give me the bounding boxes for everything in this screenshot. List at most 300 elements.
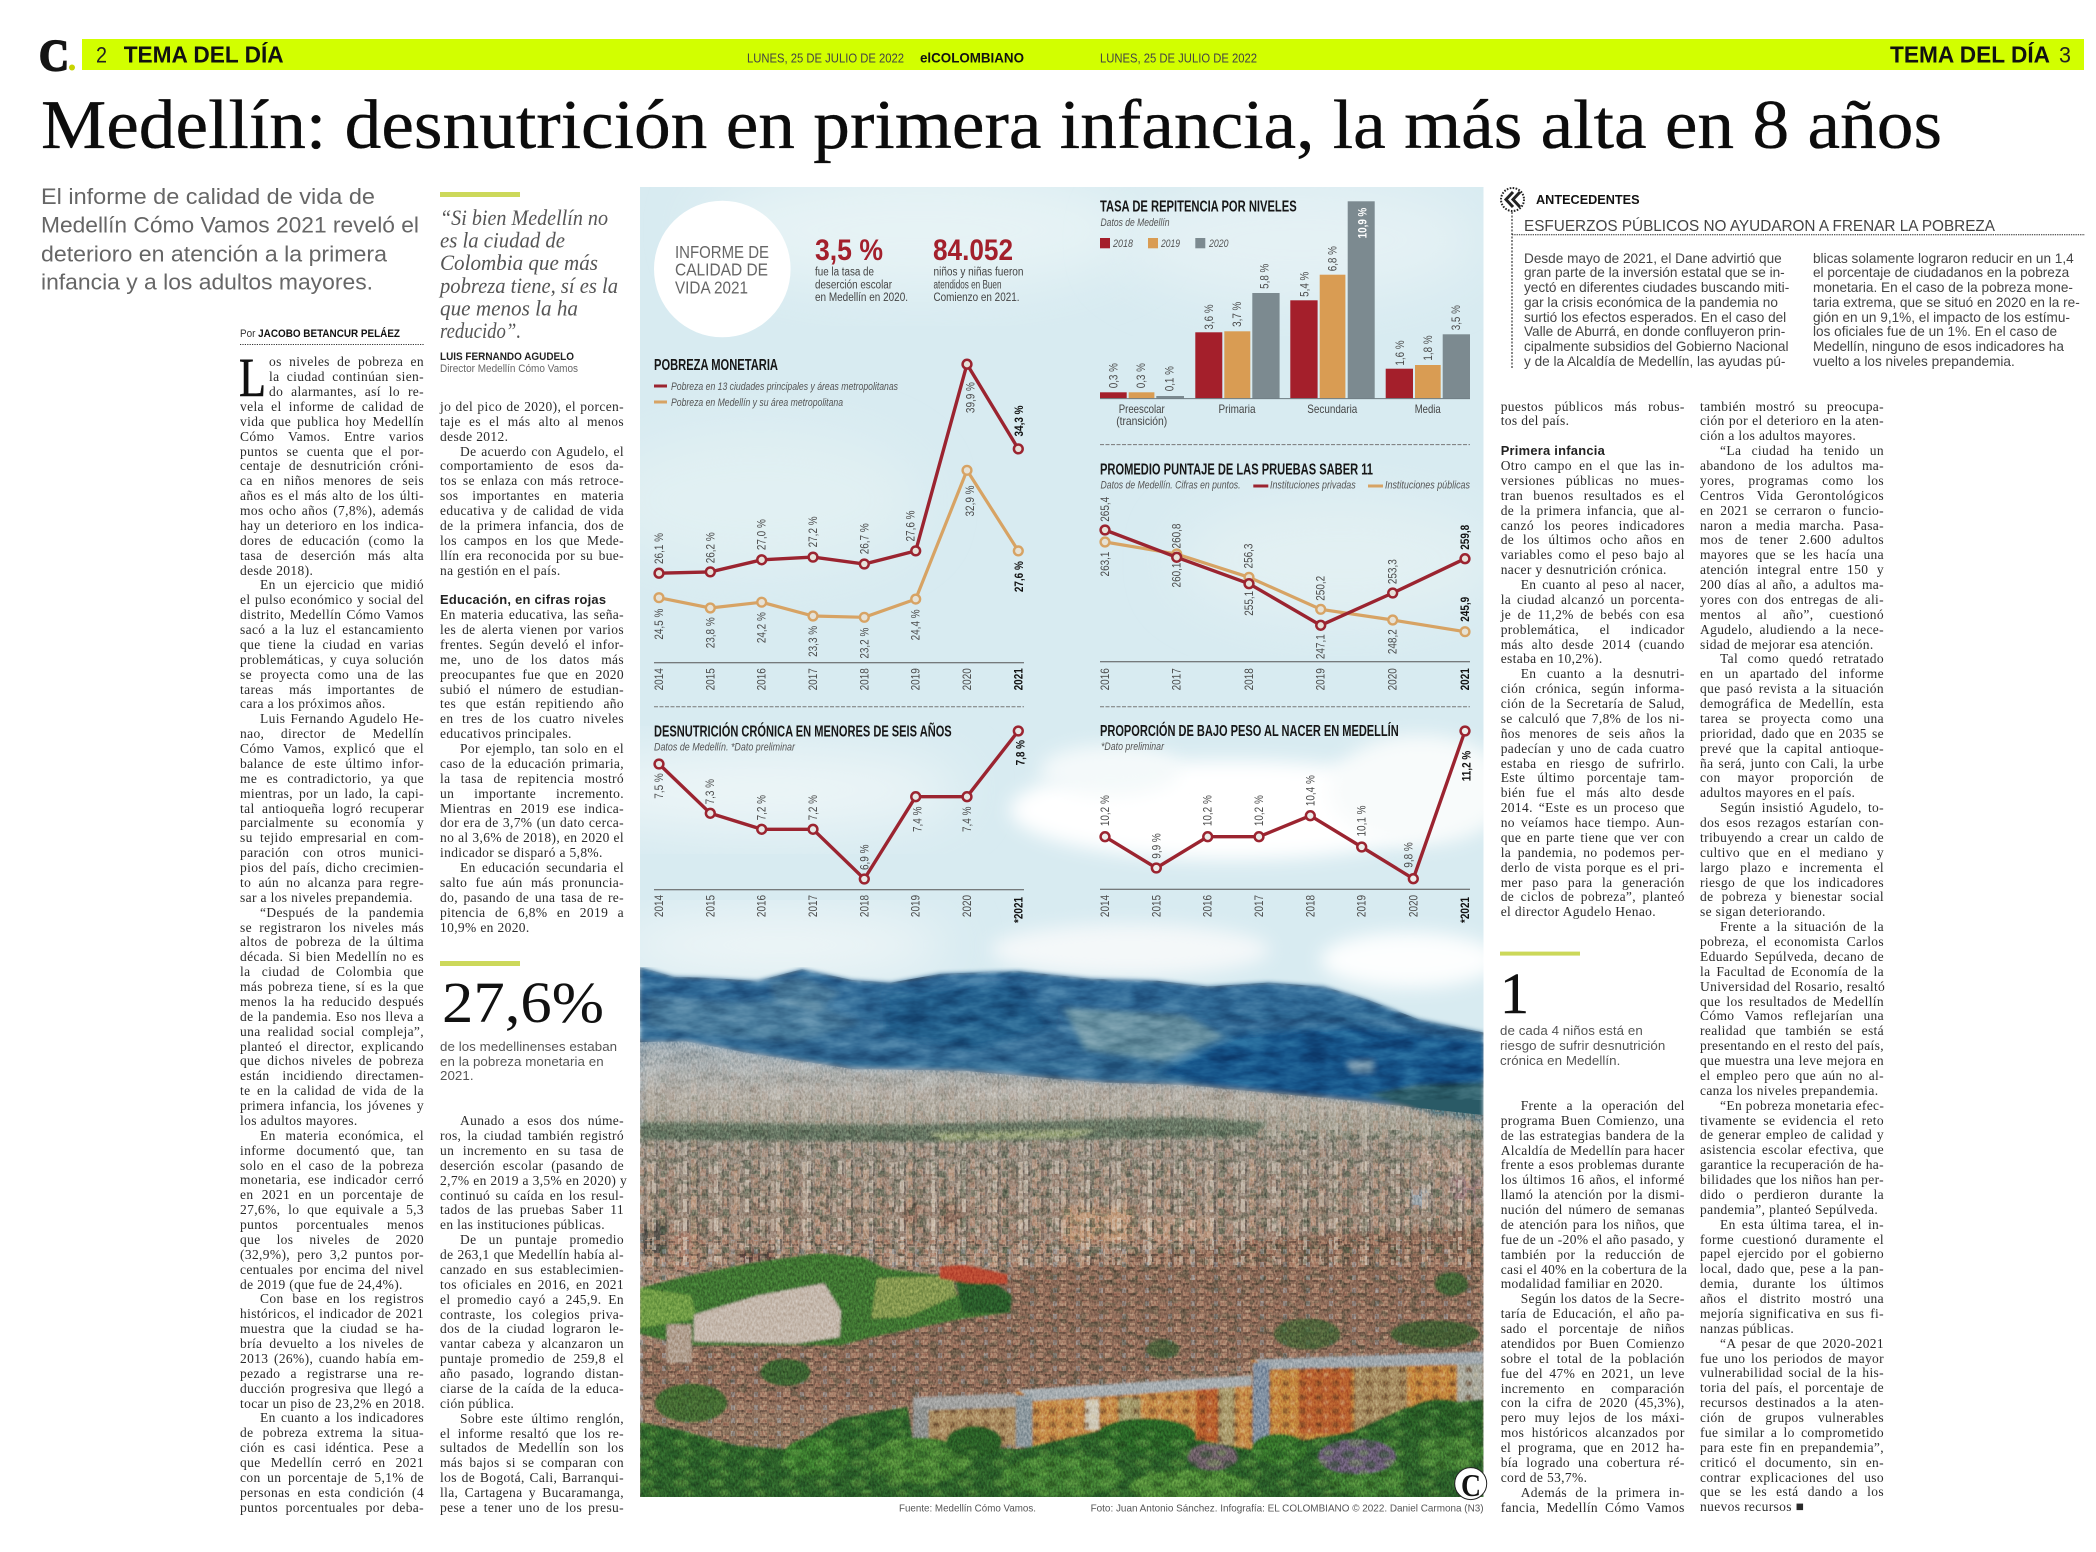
article column 2 lower: De un puntaje promedio: [460, 1232, 624, 1247]
tree and shadow specks: [640, 1130, 1484, 1400]
category labels: (transición): [1116, 414, 1167, 428]
photo: Medellín cityscape: [640, 960, 1485, 1505]
value labels: 1,6 %: [1394, 340, 1407, 366]
article column 3 lower: Según los datos de la Secre-: [1521, 1291, 1685, 1306]
article column 2 upper: educativa y de calidad de vida: [440, 503, 624, 518]
value labels: 3,5 %: [1450, 305, 1463, 330]
byline: Por JACOBO BETANCUR PELÁEZ: [240, 327, 400, 340]
article column 2 upper: salto fue aún más pronuncia-: [440, 875, 624, 890]
article column 1: puntos se cuenta que el por-: [240, 444, 424, 459]
value labels: 7,2 %: [807, 795, 820, 820]
article column 2 lower: contraste, los colegios priva-: [440, 1307, 624, 1322]
article column 1: bría devuelto a los niveles de: [240, 1336, 424, 1351]
article column 3 upper: la ciudad alcanzó un porcenta-: [1501, 592, 1685, 607]
article column 2 upper: de la primera infancia, dos de: [440, 518, 624, 533]
line: desnutrición: [655, 727, 1023, 883]
article column 3 upper: problemática, el indicador: [1501, 622, 1685, 637]
article column 2 upper: tos se enlaza con más retroce-: [440, 473, 624, 488]
article column 3 upper: tran buenos resultados es el: [1501, 488, 1685, 503]
article column 1: mientras, por un lado, la capi-: [240, 786, 424, 801]
article column 1: balance de este último infor-: [240, 756, 424, 771]
article column 3 lower: sobre el total de la población: [1501, 1351, 1685, 1366]
article column 1: solo en el caso de la pobreza: [240, 1158, 424, 1173]
stat caption: 1 de cada 4: [1500, 1023, 1665, 1068]
article column 1: distrito, Medellín Cómo Vamos: [240, 607, 424, 622]
sidebar text column 2: [1813, 251, 2080, 369]
value labels: 26,1 %: [653, 533, 666, 564]
article column 3 upper: tos del país.: [1501, 413, 1569, 428]
article column 3 upper: estaba en 10,2%).: [1501, 651, 1603, 666]
pull quote: reducido”.: [440, 318, 521, 343]
article column 3 lower: Alcaldía de Medellín para hacer: [1501, 1143, 1685, 1158]
article column 3 upper: Este último porcentaje tam-: [1501, 770, 1685, 785]
article column 4: Frente a la situación de la: [1720, 919, 1884, 934]
article column 2 upper: me, uno de los datos más: [440, 652, 624, 667]
panel label circle: informe de calidad de vida: INFORME DE: [675, 242, 769, 262]
article column 4: abandono de los adultos ma-: [1700, 458, 1884, 473]
article column 3 lower: cord de 53,7%.: [1501, 1470, 1587, 1485]
article column 4: asistencia escolar efectiva, que: [1700, 1142, 1884, 1157]
chart subtitle: *Dato preliminar: [1101, 741, 1165, 753]
article column 4: yores, programas como los: [1700, 473, 1884, 488]
article column 2 lower: ciarse de la caída de la educa-: [440, 1381, 624, 1396]
article column 3 upper: el director Agudelo Henao.: [1501, 904, 1656, 919]
year axis: 2018: [859, 668, 872, 690]
article column 1: do alarmantes, así lo re-: [269, 384, 424, 399]
pull quote: pobreza tiene, sí es la: [438, 273, 618, 298]
article column 4: que muestra una leve mejora en: [1700, 1053, 1884, 1068]
year axis: 2018: [1305, 895, 1318, 917]
article column 2 lower: puntaje promedio de 259,8 el: [440, 1351, 624, 1366]
article column 4: forme cuestionó duramente el: [1700, 1232, 1884, 1247]
value labels: 11,2 %: [1461, 751, 1474, 781]
article column 2 upper: caso de la educación primaria,: [440, 756, 624, 771]
sidebar text column 2: taria extrema, que se situó en 2020 en la re-: [1813, 295, 2080, 310]
value labels: 10,1 %: [1356, 805, 1369, 836]
far city: [640, 1041, 1484, 1142]
article column 1: la ciudad de Colombia que: [240, 964, 424, 979]
article column 4: de pobreza y bienestar social: [1700, 889, 1884, 904]
article column 4: Universidad del Rosario, resaltó: [1700, 979, 1885, 994]
stat: 3,5 %: 3,5 %: [815, 234, 883, 267]
stat callout: 1 de cada 4: 1: [1500, 961, 1529, 1026]
article column 4: nuevos recursos ■: [1700, 1499, 1804, 1514]
article column 1: los adultos mayores.: [240, 1113, 358, 1128]
deck text: [41, 184, 419, 294]
sidebar header: antecedentes: ANTECEDENTES: [1536, 193, 1640, 207]
article column 4: “La ciudad ha tenido un: [1720, 443, 1884, 458]
value labels: [1107, 207, 1463, 391]
article column 1: altos de pobreza de la última: [240, 934, 424, 949]
header bar: [82, 39, 2084, 70]
panel label circle: informe de calidad de vida: CALIDAD DE: [675, 260, 768, 280]
article column 1: cara a los próximos años.: [240, 696, 386, 711]
legend: [1253, 480, 1470, 492]
scattered slope trees: [760, 1359, 810, 1386]
value labels: 24,5 %: [653, 609, 666, 640]
stat: 84.052: 84.052: [933, 234, 1013, 267]
article column 3 lower: [1500, 1098, 1687, 1515]
article column 2 upper: preocupantes fue que en 2020: [440, 667, 624, 682]
article column 3 upper: padecían y uno de cada cuatro: [1501, 741, 1685, 756]
deck text: Medellín Cómo Vamos 2021 reveló el: [41, 213, 419, 238]
article column 4: yores con dos entregas de ali-: [1700, 592, 1884, 607]
panel label circle: informe de calidad de vida: VIDA 2021: [675, 277, 748, 297]
article column 1: te en la calidad de vida de la: [240, 1083, 424, 1098]
article column 3 lower: con la cifra de 2020 (45,3%),: [1501, 1395, 1685, 1410]
chart: bajo peso al nacer: [1099, 721, 1474, 923]
year axis: 2017: [807, 895, 820, 917]
article column 1: el pulso económico y social del: [240, 592, 424, 607]
article column 4: dido o perdieron durante la: [1700, 1187, 1884, 1202]
value labels: 7,2 %: [756, 795, 769, 820]
article column 2 upper: un importante incremento.: [440, 786, 624, 801]
year axis: 2019: [910, 895, 923, 917]
article column 4: canza los niveles prepandemia.: [1700, 1083, 1878, 1098]
article column 1: se registraron los niveles más: [240, 920, 424, 935]
year axis: 2017: [1171, 668, 1184, 690]
article column 1: parcialmente su economía y: [240, 815, 424, 830]
bars: preescolar: [1100, 392, 1184, 398]
article column 2 lower: ros, la ciudad también registró: [440, 1128, 624, 1143]
article column 4: “En pobreza monetaria efec-: [1720, 1098, 1884, 1113]
stat: 3,5 %: [815, 234, 908, 304]
chart heading: POBREZA MONETARIA: [654, 357, 778, 374]
drop cap: L: [239, 347, 266, 408]
article column 1: pezado a registrarse una re-: [240, 1366, 424, 1381]
article column 1: históricos, el indicador de 2021: [240, 1306, 424, 1321]
article column 4: fue similar a lo comprometido: [1700, 1425, 1884, 1440]
stat: 84.052: niños y niñas fueron: [934, 267, 1024, 279]
article column 3 lower: frente a esos problemas durante: [1501, 1157, 1685, 1172]
article column 2 upper: do, pasando de una tasa de re-: [440, 890, 624, 905]
value labels: 253,3: [1387, 559, 1400, 584]
article column 1: hay un deterioro en los indica-: [240, 518, 424, 533]
article column 1: ca en niños menores de seis: [240, 473, 424, 488]
value labels: 27,6 %: [1013, 561, 1026, 592]
article column 4: contrar explicaciones del uso: [1700, 1470, 1884, 1485]
article column 2 lower: Aunado a esos dos núme-: [460, 1113, 624, 1128]
article column 2 lower: ción pública.: [440, 1396, 514, 1411]
title: Medellín: desnutrición en primera infancia, la más alta en 8 años: [41, 87, 1942, 164]
article column 4: ción de grupos vulnerables: [1700, 1410, 1884, 1425]
chart subtitle: Datos de Medellín. *Dato preliminar: [654, 742, 796, 754]
article column 3 upper: puestos públicos más robus-: [1501, 399, 1685, 414]
article column 4: ción por el deterioro en la aten-: [1700, 413, 1884, 428]
article column 2 upper: llín era reconocida por su bue-: [440, 548, 624, 563]
article column 1: 2013 (26%), cuando había em-: [240, 1351, 424, 1366]
sidebar text column 1: gar la crisis económica de la pandemia no: [1524, 295, 1778, 310]
year axis: [1099, 668, 1472, 690]
article column 1: problemáticas, y cuya solución: [240, 652, 424, 667]
year axis: 2015: [705, 895, 718, 917]
article column 2 lower: tos oficiales en 2016, en 2021: [440, 1277, 624, 1292]
deck text: infancia y a los adultos mayores.: [41, 269, 373, 294]
far and mid city towers: [640, 1040, 1484, 1470]
article column 3 upper: más alto desde 2014 (cuando: [1501, 637, 1685, 652]
value labels: 26,2 %: [705, 532, 718, 563]
chart subtitle: Datos de Medellín. Cifras en puntos.: [1100, 480, 1240, 492]
bars: secundaria: [1290, 201, 1375, 398]
category labels: Primaria: [1218, 402, 1256, 416]
article column 4: Centros Vida Gerontológicos: [1700, 488, 1884, 503]
article column 4: pobreza, el economista Carlos: [1700, 934, 1884, 949]
year axis: 2014: [653, 895, 666, 917]
line: pobreza Medellín: [655, 466, 1023, 622]
article column 4: garantice la recuperación de ha-: [1700, 1157, 1884, 1172]
stat: 3,5 %: deserción escolar: [815, 280, 892, 292]
article column 4: Agudelo, aludiendo a la nece-: [1700, 622, 1884, 637]
chart subtitle: Datos de Medellín: [1100, 217, 1170, 229]
article column 2 lower: continuó su caída en los resul-: [440, 1188, 624, 1203]
article column 2 lower: [440, 1113, 627, 1515]
article column 4: ción a los adultos mayores.: [1700, 428, 1856, 443]
article column 1: “Después de la pandemia: [260, 905, 424, 920]
value labels: 0,3 %: [1135, 363, 1148, 388]
article column 4: 200 días al año, a adultos ma-: [1700, 577, 1884, 592]
article column 2 upper: Por ejemplo, tan solo en el: [460, 741, 624, 756]
article column 1: ducción progresiva que llegó a: [240, 1381, 424, 1396]
article column 2 lower: más bajos si se comparan con: [440, 1455, 624, 1470]
icon: El Colombiano logo: C: [39, 31, 69, 80]
article column 3 lower: sado el porcentaje de niños: [1501, 1321, 1685, 1336]
article column 3 upper: de la primera infancia, que al-: [1501, 503, 1685, 518]
sidebar text column 2: los oficiales fue de un 1%. En el caso de: [1813, 324, 2057, 339]
icon: logo on photo: C: [1461, 1467, 1481, 1503]
article column 3 upper: bién fue el más alto desde: [1501, 785, 1685, 800]
article column 2 upper: frentes. Según develó el infor-: [440, 637, 624, 652]
article column 1: to aún no alcanza para regre-: [240, 875, 424, 890]
article column 1: muestra que la ciudad se ha-: [240, 1321, 424, 1336]
article column 4: demográfica de Medellín, esta: [1700, 696, 1884, 711]
article column 3 upper: no veíamos hace tiempo. Aun-: [1501, 815, 1685, 830]
article column 3 lower: de atención para los niños, que: [1501, 1217, 1685, 1232]
article column 4: cultivo que en el mediano y: [1700, 845, 1884, 860]
article column 4: en 2021 se cerraron o funcio-: [1700, 503, 1884, 518]
value labels: 24,4 %: [910, 609, 923, 640]
chart heading: PROPORCIÓN DE BAJO PESO AL NACER EN MEDELLÍN: [1100, 721, 1399, 740]
category labels: Media: [1415, 402, 1441, 416]
category labels: Preescolar: [1119, 402, 1165, 416]
article column 1: de pobreza extrema la situa-: [240, 1425, 424, 1440]
year axis: [653, 668, 1026, 690]
header left date: LUNES, 25 DE JULIO DE 2022: [747, 51, 904, 66]
value labels: [653, 382, 1026, 659]
article column 4: papel ejercido por el gobierno: [1700, 1246, 1884, 1261]
article column 3 lower: fancia, Medellín Cómo Vamos: [1501, 1500, 1685, 1515]
article column 4: bilidades que los niños han per-: [1700, 1172, 1884, 1187]
value labels: 1,8 %: [1422, 335, 1435, 361]
pull quote: Director Medellín Cómo Vamos: [440, 363, 578, 375]
value labels: 265,4: [1099, 497, 1112, 522]
sidebar text column 2: blicas solamente lograron reducir en un 1,4: [1813, 251, 2074, 266]
sidebar text column 1: gran parte de la inversión estatal que se in-: [1524, 265, 1785, 280]
legend: Instituciones públicas: [1385, 480, 1470, 492]
stat caption: 27,6%: en la pobreza monetaria en: [440, 1054, 604, 1068]
article column 2 upper: [440, 399, 624, 935]
year axis: 2018: [1243, 668, 1256, 690]
article column 4: Tal como quedó retratado: [1720, 651, 1884, 666]
value labels: 26,7 %: [859, 523, 872, 554]
article column 4: [1700, 399, 1885, 1514]
article column 4: en un apartado del informe: [1700, 666, 1884, 681]
year axis: 2015: [1151, 895, 1164, 917]
value labels: 10,2 %: [1253, 795, 1266, 826]
article column 2 lower: un incremento en su tasa de: [440, 1143, 624, 1158]
legend: Pobreza en Medellín y su área metropolitana: [671, 397, 843, 409]
article column 4: nanzas públicas.: [1700, 1321, 1794, 1336]
article column 2 lower: año pasado, logrando distan-: [440, 1366, 624, 1381]
value labels: 9,9 %: [1151, 833, 1164, 859]
year axis: 2016: [1099, 668, 1112, 690]
deck text: deterioro en atención a la primera: [41, 242, 388, 267]
article column 1: 27,6%, lo que equivale a 5,3: [240, 1202, 424, 1217]
article column 2 lower: el informe resaltó que los re-: [440, 1426, 624, 1441]
stat: 84.052: Comienzo en 2021.: [934, 292, 1020, 304]
article column 2 upper: En educación secundaria el: [460, 860, 624, 875]
header right date: LUNES, 25 DE JULIO DE 2022: [1100, 51, 1257, 66]
article column 3 lower: Frente a la operación del: [1521, 1098, 1685, 1113]
article column 3 upper: de ciclos de pobreza”, planteó: [1501, 889, 1685, 904]
stat caption: 1 de cada 4: riesgo de sufrir desnutrición: [1500, 1038, 1665, 1053]
year axis: 2014: [653, 668, 666, 690]
article column 3 lower: mos históricos alcanzados por: [1501, 1425, 1685, 1440]
article column 2 lower: Sobre este último renglón,: [460, 1411, 624, 1426]
article column 3 lower: modalidad familiar en 2020.: [1501, 1276, 1663, 1291]
year axis: 2020: [1408, 895, 1421, 917]
icon: double chevron badge: [1501, 188, 1524, 211]
chart: promedio pruebas Saber 11: [1099, 461, 1472, 690]
value labels: 5,4 %: [1298, 272, 1312, 297]
article column 4: mayores que se les hacía una: [1700, 547, 1884, 562]
value labels: 23,3 %: [807, 626, 820, 657]
article column 3 lower: de las estrategias bandera de la: [1501, 1128, 1685, 1143]
article column 2 upper: educativos principales.: [440, 726, 572, 741]
value labels: 7,3 %: [704, 779, 717, 804]
valley green strip: [640, 1117, 1268, 1142]
article column 3 upper: de los últimos ocho años en: [1501, 532, 1685, 547]
header left page number: 2: [96, 43, 107, 68]
article column 1: Luis Fernando Agudelo He-: [260, 711, 424, 726]
article column 2 lower: los de Bogotá, Cali, Barranqui-: [440, 1470, 624, 1485]
sidebar text column 1: cipalmente subsidios del Gobierno Nacional: [1524, 339, 1788, 354]
article column 4: que pasó revista a la situación: [1700, 681, 1884, 696]
value labels: 248,2: [1387, 629, 1400, 654]
article column 1: En un ejercicio que midió: [260, 577, 424, 592]
year axis: 2020: [1387, 668, 1400, 690]
article column 2 lower: de 263,1 que Medellín había al-: [440, 1247, 624, 1262]
stat callout: 1 de cada 4: [1500, 952, 1580, 1026]
article column 4: largo plazo e incrementa el: [1700, 860, 1884, 875]
article column 4: toria del país, el porcentaje de: [1700, 1380, 1884, 1395]
stat caption: 1 de cada 4: de cada 4 niños está en: [1500, 1023, 1643, 1038]
article column 4: criticó el documento, sin en-: [1700, 1455, 1884, 1470]
value labels: 256,3: [1243, 544, 1256, 568]
bars: primaria: [1195, 293, 1280, 398]
article column 1: sar a los niveles prepandemia.: [240, 890, 413, 905]
article column 3 lower: pero muy lejos de los máxi-: [1501, 1410, 1685, 1425]
legend: Pobreza en 13 ciudades principales y áreas metropolitanas: [671, 381, 898, 393]
article column 4: que los resultados de Medellín: [1700, 994, 1884, 1009]
article column 2 upper: les de alerta vienen por varios: [440, 622, 624, 637]
value labels: 259,8: [1459, 525, 1472, 550]
chart heading: TASA DE REPITENCIA POR NIVELES: [1100, 198, 1297, 215]
article column 2 lower: vantar cabeza y alcanzaron un: [440, 1336, 624, 1351]
sidebar header: antecedentes: [1501, 188, 2085, 369]
article column 1: centaje de desnutrición cróni-: [240, 458, 424, 473]
article column 4: que se les está dando a los: [1700, 1484, 1884, 1499]
hillside houses: [640, 1240, 1484, 1470]
stat: 84.052: [933, 234, 1024, 304]
value labels: 7,8 %: [1015, 740, 1028, 765]
sidebar text column 1: Desde mayo de 2021, el Dane advirtió que: [1524, 251, 1782, 266]
article column 4: ña será, junto con Cali, la urbe: [1700, 756, 1884, 771]
value labels: 260,8: [1171, 524, 1184, 548]
value labels: 263,1: [1099, 552, 1112, 576]
article column 2 lower: pese a tener uno de los presu-: [440, 1500, 624, 1515]
building and foliage grain: [640, 1040, 1484, 1497]
sidebar text column 2: vuelto a los niveles prepandemia.: [1813, 354, 2015, 369]
year axis: 2015: [705, 668, 718, 690]
quote attribution: LUIS FERNANDO AGUDELO: [440, 351, 574, 363]
article column 3 lower: fue del 47% en 2021, un leve: [1501, 1366, 1685, 1381]
sidebar text column 1: [1524, 251, 1789, 369]
header left section name: TEMA DEL DÍA: [124, 41, 284, 68]
article column 3 upper: ños menores de seis años la: [1501, 726, 1685, 741]
article column 3 upper: ción crónica, según informa-: [1501, 681, 1685, 696]
article column 4: presentando en el resto del país,: [1700, 1038, 1884, 1053]
main city: [640, 1138, 1484, 1499]
article column 3 upper: ción de la Secretaría de Salud,: [1501, 696, 1685, 711]
article column 1: (32,9%), pero 3,2 puntos por-: [240, 1247, 424, 1262]
article column 2 lower: en las instituciones públicas.: [440, 1217, 605, 1232]
article column 1: En cuanto a los indicadores: [260, 1410, 424, 1425]
article column 4: para este fin en prepandemia”,: [1700, 1440, 1884, 1455]
foreground apartment buildings: [928, 1406, 1016, 1446]
article column 3 upper: que en parte tiene que ver con: [1501, 830, 1685, 845]
article column 1: puntos porcentuales menos: [240, 1217, 424, 1232]
panel label circle: informe de calidad de vida: [654, 201, 791, 337]
value labels: 34,3 %: [1013, 405, 1026, 436]
value labels: [653, 740, 1028, 870]
article column 4: Cómo Vamos reflejarían una: [1700, 1008, 1884, 1023]
article column 4: Según insistió Agudelo, to-: [1720, 800, 1884, 815]
bars: media: [1386, 334, 1470, 398]
article column 4: la Facultad de Economía de la: [1700, 964, 1884, 979]
article column 2 upper: na gestión en el país.: [440, 563, 561, 578]
article column 3 upper: En cuanto a la desnutri-: [1521, 666, 1685, 681]
article column 1: Con base en los registros: [260, 1291, 424, 1306]
article column 2 lower: el promedio cayó a 245,9. En: [440, 1292, 624, 1307]
article column 3 upper: la pandemia, no podemos per-: [1501, 845, 1685, 860]
legend: [1100, 238, 1229, 250]
red building: [940, 1265, 1007, 1284]
article column 4: prevé que la capital antioque-: [1700, 741, 1884, 756]
article column 1: En materia económica, el: [260, 1128, 424, 1143]
article column 1: de 2019 (que fue de 24,4%).: [240, 1277, 403, 1292]
article column 3 lower: atendidos por Buen Comienzo: [1501, 1336, 1685, 1351]
year axis: 2020: [961, 895, 974, 917]
article column 2 upper: los campos en los que Mede-: [440, 533, 624, 548]
deck text: El informe de calidad de vida de: [41, 184, 375, 209]
sidebar text column 1: yectó en diferentes ciudades buscando miti-: [1524, 280, 1789, 295]
article column 4: de generar empleo de calidad y: [1700, 1127, 1884, 1142]
article column 1: de la pandemia. Eso nos lleva a: [240, 1009, 424, 1024]
article column 1: su tejido empresarial en com-: [240, 830, 424, 845]
sidebar text column 2: Medellín, ninguno de esos indicadores ha: [1813, 339, 2064, 354]
panel: infographic background: [640, 187, 1484, 1037]
line: pobreza 13 ciudades: [655, 360, 1023, 578]
